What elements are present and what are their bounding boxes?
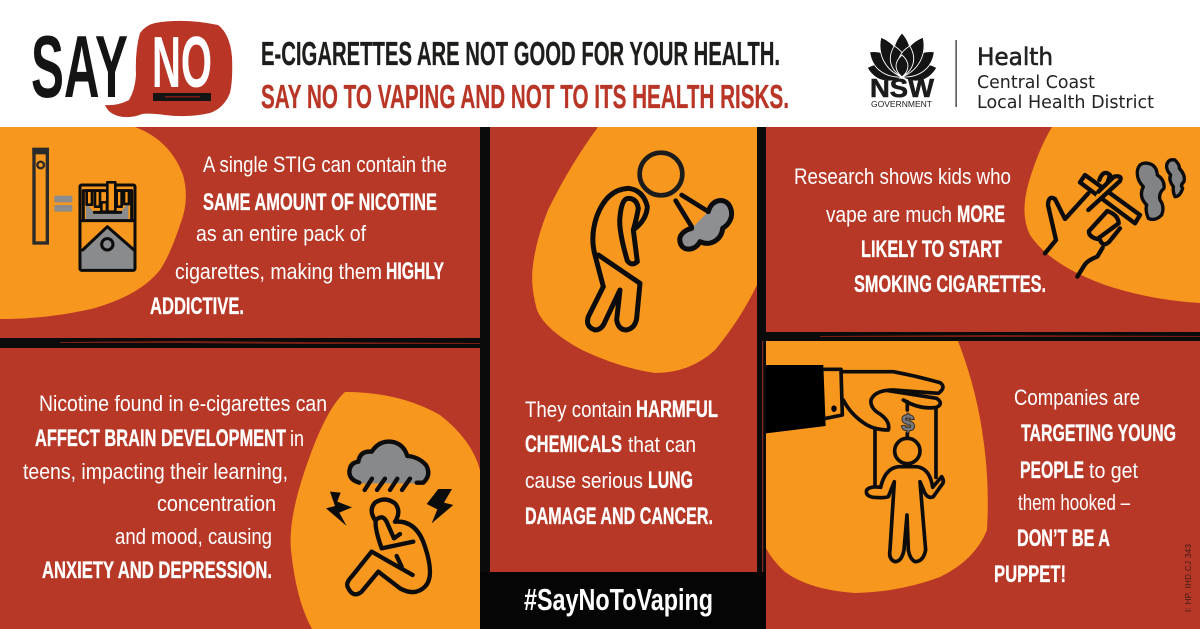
text: companies: Companies are <box>1014 385 1140 410</box>
hashtag banner <box>480 572 766 629</box>
logo: NSW Government <box>864 33 940 109</box>
orange blob <box>291 392 480 629</box>
text: nicotine: HIGHLY <box>386 258 444 285</box>
panel: targeting young people <box>766 341 1193 612</box>
logo: Health district: Local Health District <box>977 92 1154 113</box>
text: nicotine: A single STIG can contain the <box>203 152 447 177</box>
headline: E-CIGARETTES ARE NOT GOOD FOR YOUR HEALTH. <box>261 36 780 73</box>
text: chemicals: They contain <box>525 397 632 422</box>
text: companies: DON’T BE A <box>1017 525 1110 552</box>
text: kids smoking: LIKELY TO START <box>861 236 1002 263</box>
icon: vape equals cigarette pack <box>32 148 135 270</box>
logo: Health district: Central Coast <box>977 72 1095 93</box>
text: kids smoking: Research shows kids who <box>794 164 1011 189</box>
header <box>0 0 1200 127</box>
icon: hand with cigarette and smoke <box>1045 160 1184 277</box>
icon: hand controlling puppet <box>766 365 943 562</box>
text: chemicals: DAMAGE AND CANCER. <box>525 503 713 530</box>
text: nicotine: SAME AMOUNT OF NICOTINE <box>203 189 437 216</box>
panel dividers <box>0 127 1200 629</box>
text: chemicals <box>525 396 718 530</box>
text: chemicals: LUNG <box>648 467 693 494</box>
text: kids smoking: MORE <box>957 201 1005 228</box>
text: chemicals: CHEMICALS <box>525 431 622 458</box>
text: nicotine: ADDICTIVE. <box>150 293 244 320</box>
icon: hand controlling puppet: $ <box>901 410 914 436</box>
logo: Say No: NO <box>152 23 212 103</box>
text: companies: them hooked – <box>1018 490 1130 515</box>
text: nicotine <box>150 152 447 320</box>
panel: nicotine in a stig <box>0 127 447 320</box>
text: companies <box>994 385 1176 588</box>
text: companies: PEOPLE <box>1020 457 1084 484</box>
text: brain: concentration <box>157 491 276 516</box>
orange blob <box>766 341 988 593</box>
orange blob <box>0 127 186 319</box>
code label: I: HP. IHD.CJ 343 <box>1184 543 1193 612</box>
text: kids smoking <box>794 164 1046 298</box>
logo: Health district: Health <box>977 43 1053 71</box>
panel: brain development <box>23 391 480 629</box>
text: companies: PUPPET! <box>994 561 1066 588</box>
text: companies: to get <box>1089 458 1139 483</box>
logo: NSW Government: GOVERNMENT <box>871 99 932 109</box>
logo: NSW Government: NSW <box>870 73 934 103</box>
text: brain: Nicotine found in e-cigarettes can <box>39 391 327 416</box>
panel: harmful chemicals <box>525 127 757 530</box>
icon: waratah <box>864 33 940 85</box>
cough cloud <box>680 201 732 249</box>
text: nicotine: cigarettes, making them <box>175 259 382 284</box>
text: brain <box>23 391 327 584</box>
logo: Say No: SAY <box>31 17 128 116</box>
text: chemicals: HARMFUL <box>636 396 718 423</box>
text: nicotine: as an entire pack of <box>196 221 367 246</box>
text: kids smoking: vape are much <box>826 202 952 227</box>
text: brain: in <box>290 426 304 451</box>
orange blob <box>532 127 757 373</box>
panel: start smoking <box>794 127 1200 303</box>
icon: coughing person <box>587 153 732 330</box>
text: kids smoking: SMOKING CIGARETTES. <box>854 271 1046 298</box>
text: brain: teens, impacting their learning, <box>23 459 288 484</box>
text: brain: and mood, causing <box>115 524 272 549</box>
text: brain: ANXIETY AND DEPRESSION. <box>42 557 272 584</box>
orange blob <box>1024 127 1200 303</box>
text: brain: AFFECT BRAIN DEVELOPMENT <box>35 425 286 452</box>
smoke <box>1137 160 1184 219</box>
text: chemicals: that can <box>628 432 696 457</box>
headline: SAY NO TO VAPING AND NOT TO ITS HEALTH RISKS. <box>261 79 789 116</box>
page background <box>0 127 1200 629</box>
hashtag banner: #SayNoToVaping <box>524 582 713 617</box>
icon: anxious person under rain cloud <box>326 442 453 594</box>
logo: Health district <box>977 43 1154 113</box>
text: chemicals: cause serious <box>525 468 643 493</box>
headline <box>261 36 789 116</box>
